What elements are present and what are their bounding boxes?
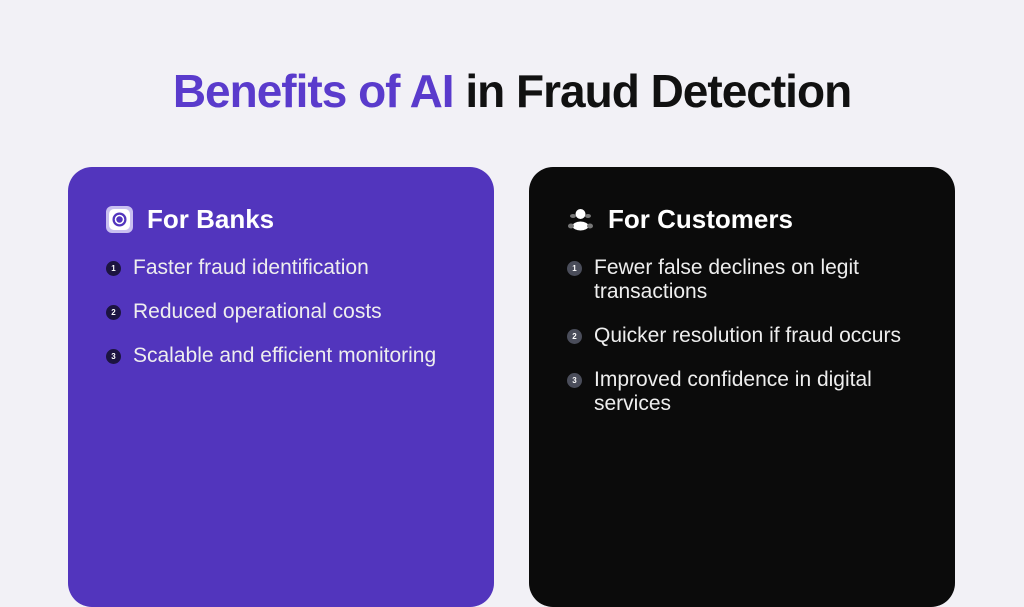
item 1: Faster fraud identification: [133, 256, 369, 279]
heading: for customers: For Customers: [608, 204, 793, 234]
panel: for banks: [68, 167, 494, 607]
title: Benefits of AI in Fraud Detection: [173, 65, 851, 117]
item 1: 1: [111, 264, 116, 273]
item 2: Quicker resolution if fraud occurs: [594, 324, 901, 347]
item 1: 1: [572, 264, 577, 273]
heading: for banks: For Banks: [147, 204, 274, 234]
item 2: 2: [111, 308, 116, 317]
item 2: Reduced operational costs: [133, 300, 382, 323]
item 3: 3: [572, 376, 577, 385]
panel: for customers: [529, 167, 955, 607]
item 3: 3: [111, 352, 116, 361]
item 3: Improved confidence in digital services: [594, 368, 872, 415]
item 2: 2: [572, 332, 577, 341]
item 3: Scalable and efficient monitoring: [133, 344, 436, 367]
item 1: Fewer false declines on legit transactions: [594, 256, 859, 303]
